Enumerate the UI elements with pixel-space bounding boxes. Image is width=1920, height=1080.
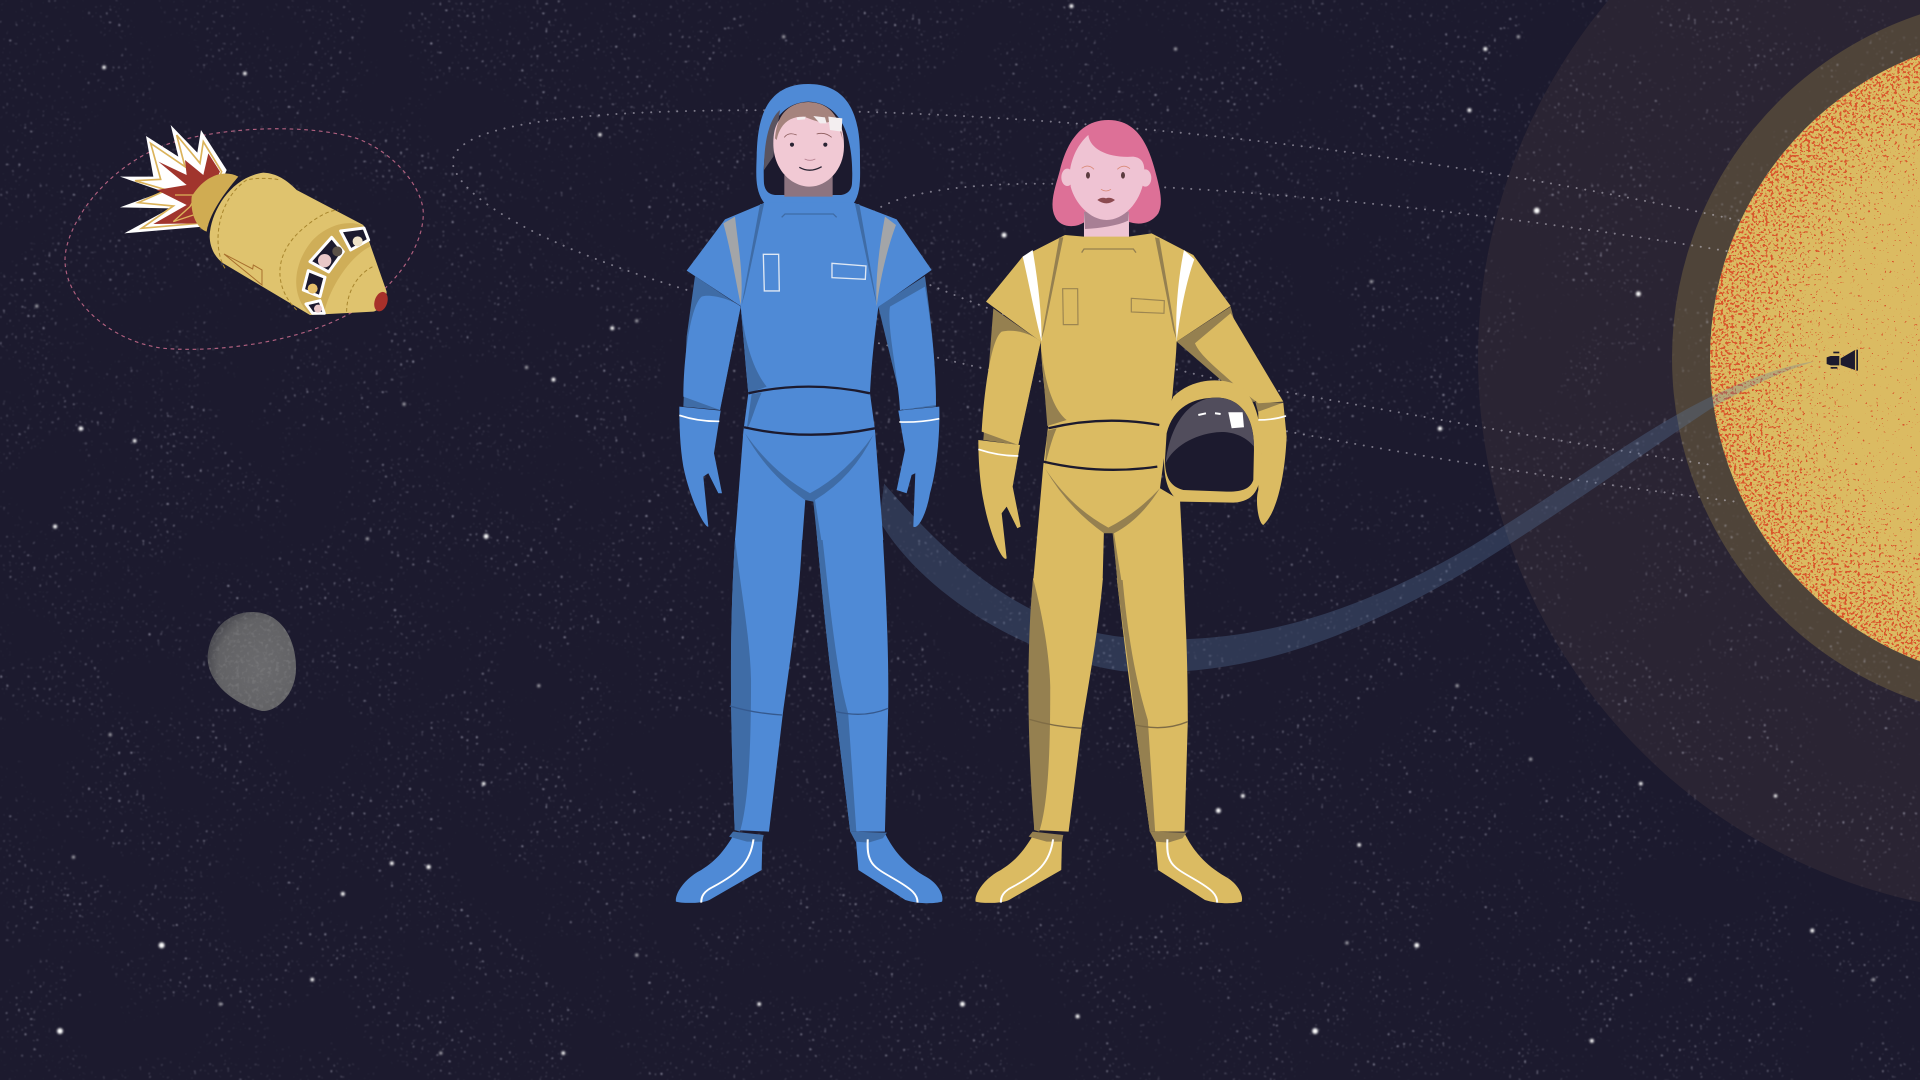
astronaut: yellow suit bbox=[975, 120, 1287, 903]
blue suit lines bbox=[679, 214, 939, 435]
blue left arm bbox=[683, 276, 741, 410]
capsule seams bbox=[218, 178, 375, 312]
pink hair bbox=[1052, 120, 1161, 226]
capsule orbit bbox=[65, 129, 423, 349]
blue right glove bbox=[897, 407, 939, 527]
moon bbox=[208, 612, 296, 711]
blue astronaut neck bbox=[784, 175, 833, 197]
yellow torso shading bbox=[1041, 237, 1177, 580]
white shoulder wedges bbox=[1023, 250, 1194, 342]
yellow left arm bbox=[983, 308, 1041, 445]
visor reflection bbox=[797, 116, 842, 132]
blue torso shading bbox=[741, 204, 877, 540]
capsule nose bbox=[372, 290, 390, 313]
blue right arm bbox=[878, 276, 936, 410]
man's face bbox=[773, 110, 844, 187]
capsule body bbox=[210, 173, 387, 315]
man's hair bbox=[775, 102, 843, 140]
capsule with explosion and orbit bbox=[65, 125, 423, 349]
yellow torso bbox=[986, 233, 1231, 580]
blue upper body bbox=[679, 84, 939, 540]
woman's face bbox=[1070, 135, 1144, 220]
dotted orbit paths bbox=[453, 110, 1739, 502]
blue legs bbox=[676, 538, 942, 903]
sun red speckle bbox=[1710, 34, 1920, 682]
blue shoulder wedges bbox=[723, 217, 896, 307]
capsule window band bbox=[296, 223, 370, 314]
flight trail bbox=[879, 361, 1815, 672]
sun bbox=[1710, 34, 1920, 682]
capsule hatch bbox=[224, 254, 262, 285]
explosion flame bbox=[120, 125, 227, 233]
astronaut: blue suit bbox=[676, 84, 942, 903]
capsule windows bbox=[303, 228, 369, 313]
yellow right arm bbox=[1177, 307, 1283, 413]
crew faces bbox=[308, 236, 363, 313]
helmet under arm bbox=[1164, 380, 1262, 503]
yellow right forearm bbox=[1257, 403, 1287, 525]
woman's neck bbox=[1084, 212, 1129, 237]
yellow suit lines bbox=[978, 249, 1286, 470]
yellow upper body bbox=[978, 120, 1287, 580]
blue torso bbox=[687, 203, 932, 540]
woman's features bbox=[1061, 166, 1151, 203]
blue hood bbox=[756, 84, 860, 204]
man's features bbox=[784, 133, 832, 170]
sun halo bbox=[1478, 0, 1920, 914]
yellow legs bbox=[975, 578, 1242, 903]
blue left glove bbox=[679, 407, 722, 527]
sun ring bbox=[1672, 0, 1920, 720]
capsule neck bbox=[191, 173, 238, 232]
icon: spacecraft silhouette on the sun bbox=[1827, 350, 1858, 371]
blue visor bbox=[764, 102, 852, 195]
yellow left glove bbox=[978, 440, 1021, 559]
